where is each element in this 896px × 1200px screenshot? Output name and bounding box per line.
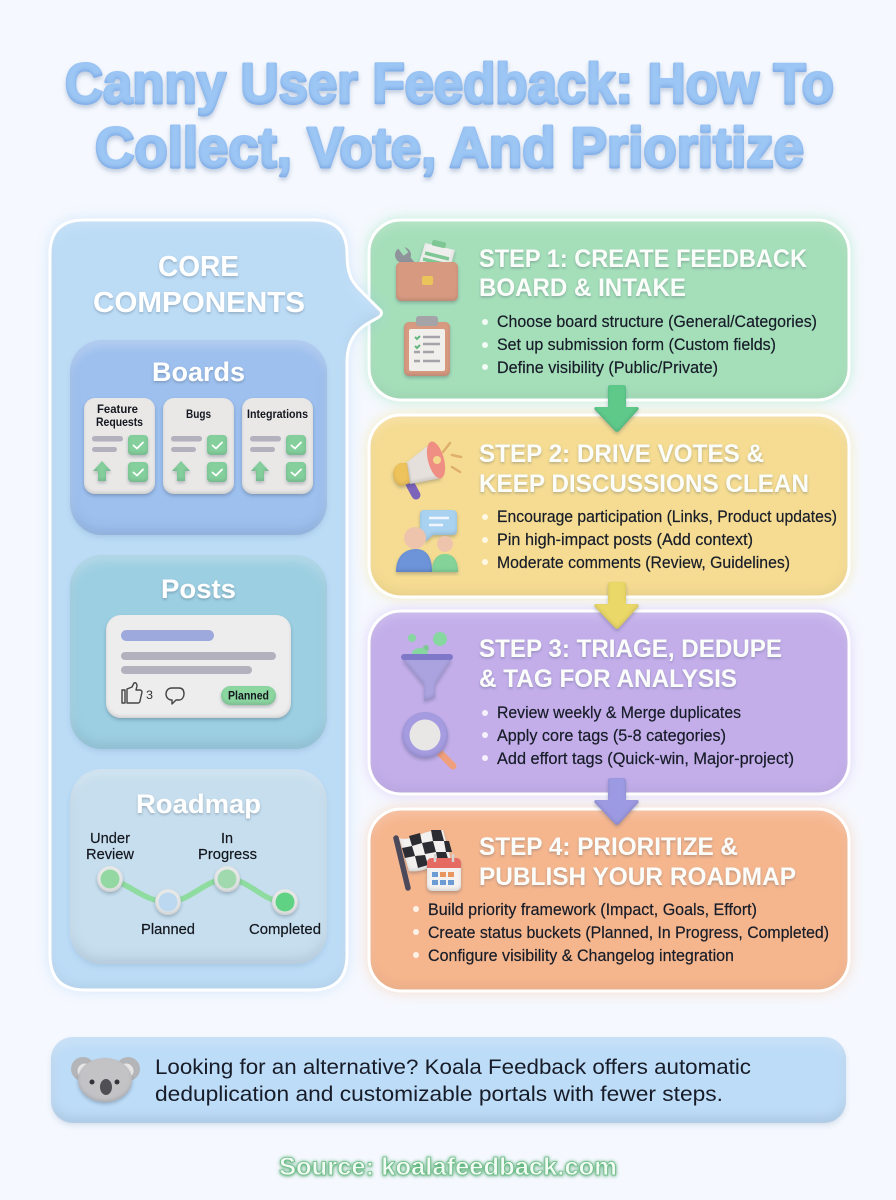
icon: comment bubble bbox=[166, 688, 184, 704]
roadmap path bbox=[110, 879, 285, 902]
panel: posts bbox=[70, 555, 327, 749]
status pill: planned: Planned bbox=[228, 690, 269, 702]
panel heading: core components: COMPONENTS bbox=[93, 287, 305, 319]
icon: thumbs up bbox=[122, 683, 142, 703]
icon: toolbox bbox=[395, 240, 458, 301]
bullet list: step 4: Create status buckets (Planned, In Progress, Completed) bbox=[428, 924, 829, 942]
callout text: Looking for an alternative? Koala Feedback offers automatic bbox=[155, 1056, 751, 1079]
title: Canny User Feedback: How To bbox=[65, 52, 834, 116]
icon: koala bbox=[71, 1057, 140, 1102]
card: bugs: Bugs bbox=[186, 409, 211, 421]
source line: Source: koalafeedback.com bbox=[279, 1153, 617, 1181]
heading: step 4 bbox=[479, 833, 796, 891]
heading: step 1: BOARD & INTAKE bbox=[479, 274, 686, 302]
node: in progress bbox=[198, 831, 257, 892]
callout: koala feedback alternative bbox=[51, 1037, 846, 1123]
heading: step 3 bbox=[479, 635, 782, 693]
bullet list: step 3: Review weekly & Merge duplicates bbox=[497, 704, 741, 722]
bullet list: step 3: Apply core tags (5-8 categories) bbox=[497, 727, 726, 745]
bullet list: step 1: Choose board structure (General/Categories) bbox=[497, 313, 817, 331]
node: planned bbox=[141, 889, 195, 938]
heading: boards: Boards bbox=[152, 357, 245, 387]
panel heading: core components: CORE bbox=[158, 251, 239, 283]
node: planned: Planned bbox=[141, 922, 195, 938]
bullet list: step 1: Define visibility (Public/Private) bbox=[497, 359, 718, 377]
panel: step 1 bbox=[369, 220, 849, 400]
status pill: planned bbox=[221, 686, 276, 705]
arrow: step 1 to step 2 bbox=[594, 385, 639, 432]
node: under review: Under bbox=[90, 831, 130, 847]
card: integrations bbox=[242, 398, 313, 494]
callout text: deduplication and customizable portals with fewer steps. bbox=[155, 1083, 723, 1106]
icon: funnel bbox=[401, 632, 453, 701]
arrow: step 3 to step 4 bbox=[594, 778, 639, 825]
title bbox=[65, 52, 834, 180]
node: in progress: In bbox=[221, 831, 233, 847]
node: completed: Completed bbox=[249, 922, 321, 938]
title: Collect, Vote, And Prioritize bbox=[95, 116, 804, 180]
bullet list: step 1: Set up submission form (Custom fields) bbox=[497, 336, 776, 354]
bullet list: step 2: Encourage participation (Links, Product updates) bbox=[497, 508, 837, 526]
vote count: 3 bbox=[146, 688, 153, 702]
bullet list: step 4 bbox=[413, 901, 829, 965]
icon: discussion people bbox=[396, 510, 458, 572]
bullet list: step 4: Build priority framework (Impact, Goals, Effort) bbox=[428, 901, 757, 919]
callout text bbox=[155, 1056, 751, 1106]
heading: step 2: KEEP DISCUSSIONS CLEAN bbox=[479, 470, 809, 498]
post card bbox=[106, 615, 291, 718]
card: feature requests: Feature bbox=[97, 404, 138, 416]
heading: step 1 bbox=[479, 245, 807, 302]
heading: step 2: STEP 2: DRIVE VOTES & bbox=[479, 440, 764, 468]
bullet list: step 3: Add effort tags (Quick-win, Major-project) bbox=[497, 750, 794, 768]
panel: step 2 bbox=[369, 415, 849, 597]
node: under review: Review bbox=[86, 847, 135, 863]
panel: roadmap bbox=[70, 769, 327, 964]
heading: roadmap: Roadmap bbox=[136, 789, 261, 819]
node: completed bbox=[249, 889, 321, 938]
node: under review bbox=[86, 831, 135, 892]
panel: step 4 bbox=[369, 809, 849, 991]
heading: step 2 bbox=[479, 440, 809, 498]
panel: core components bbox=[50, 220, 382, 990]
icon: magnifier bbox=[402, 712, 453, 766]
bullet list: step 1 bbox=[482, 313, 817, 377]
card: feature requests bbox=[84, 398, 155, 494]
bullet list: step 3 bbox=[482, 704, 794, 768]
panel: boards bbox=[70, 340, 327, 535]
heading: step 4: PUBLISH YOUR ROADMAP bbox=[479, 863, 796, 891]
heading: posts: Posts bbox=[161, 574, 236, 604]
card: bugs bbox=[163, 398, 234, 494]
heading: step 1: STEP 1: CREATE FEEDBACK bbox=[479, 245, 807, 273]
card: integrations: Integrations bbox=[247, 409, 308, 421]
icon: checkered flag with calendar bbox=[396, 830, 461, 891]
bullet list: step 2: Pin high-impact posts (Add context) bbox=[497, 531, 753, 549]
panel: step 3 bbox=[369, 611, 849, 794]
bullet list: step 2 bbox=[482, 508, 837, 572]
arrow: step 2 to step 3 bbox=[594, 582, 639, 629]
icon: megaphone bbox=[393, 440, 461, 495]
panel heading: core components bbox=[93, 251, 305, 319]
node: in progress: Progress bbox=[198, 847, 257, 863]
heading: step 3: & TAG FOR ANALYSIS bbox=[479, 665, 737, 693]
card: feature requests: Requests bbox=[96, 417, 143, 429]
bullet list: step 4: Configure visibility & Changelog integration bbox=[428, 947, 734, 965]
heading: step 3: STEP 3: TRIAGE, DEDUPE bbox=[479, 635, 782, 663]
icon: clipboard bbox=[404, 316, 450, 376]
heading: step 4: STEP 4: PRIORITIZE & bbox=[479, 833, 738, 861]
bullet list: step 2: Moderate comments (Review, Guidelines) bbox=[497, 554, 790, 572]
